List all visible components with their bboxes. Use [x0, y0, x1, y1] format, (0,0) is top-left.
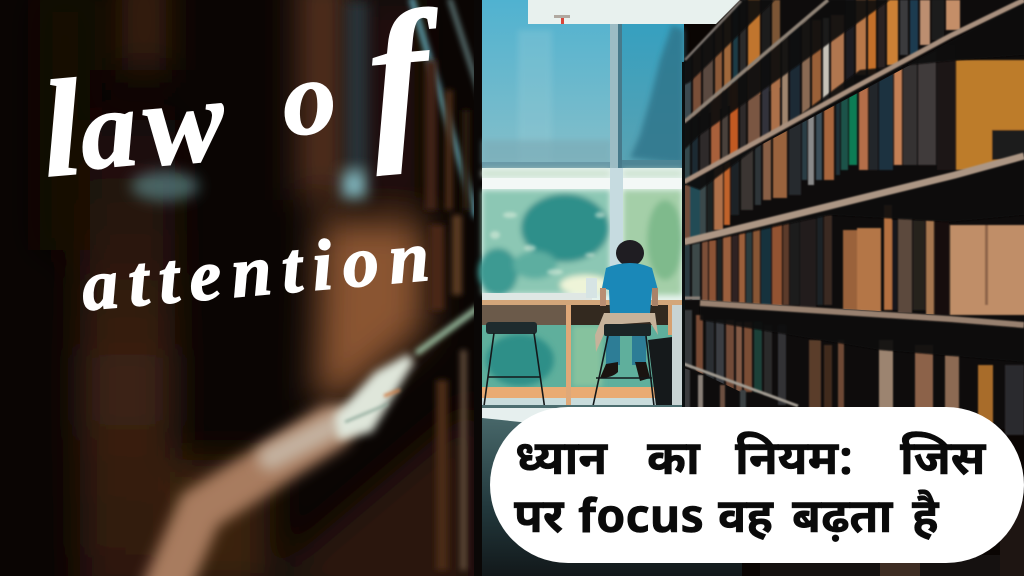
book row two	[684, 0, 960, 190]
caption line one: का	[647, 433, 701, 494]
backpack	[648, 337, 672, 406]
shelf boards	[684, 0, 1024, 406]
left stool	[484, 322, 545, 410]
title: law of attention	[31, 0, 452, 326]
floor	[482, 405, 742, 576]
title word: law of: o	[277, 37, 340, 158]
desk	[482, 300, 682, 408]
panel: window and reading desk	[478, 0, 742, 576]
book row six	[684, 368, 746, 410]
caption line two: focus	[578, 491, 704, 552]
title word: law of: w	[138, 52, 230, 191]
title word: attention: attention	[78, 215, 443, 326]
caption line two: बढ़ता	[792, 491, 894, 552]
window view of trees	[478, 168, 683, 301]
blurred bright shelf	[165, 354, 414, 576]
blurred book spines near the aisle	[425, 60, 470, 570]
person studying at desk	[593, 240, 658, 406]
caption line two: पर	[514, 491, 565, 552]
panel: blurred foreground bookshelf	[52, 0, 474, 576]
caption line two: वह	[718, 491, 774, 552]
callout: Hindi caption	[490, 407, 1024, 563]
book row five	[684, 310, 1024, 435]
book row four	[684, 205, 1024, 315]
book row one	[684, 0, 780, 130]
caption line one: जिस	[900, 432, 987, 494]
ceiling	[528, 0, 740, 24]
caption line one	[515, 432, 987, 494]
lower window	[482, 325, 682, 410]
blurred shelf edges	[412, 0, 482, 352]
caption line one: ध्यान	[515, 433, 608, 494]
window roller blinds	[482, 0, 684, 168]
panel: bookshelf on the right	[682, 0, 1024, 435]
title word: law of: a	[75, 66, 142, 194]
panel: strip beneath the callout	[760, 500, 1024, 576]
caption line one: नियम:	[735, 432, 854, 494]
shadows under shelves	[684, 0, 1024, 362]
caption line two: है	[912, 490, 940, 552]
title word: law of: l	[35, 50, 88, 206]
book row three	[685, 59, 1024, 239]
blurred teal glows	[131, 0, 368, 201]
